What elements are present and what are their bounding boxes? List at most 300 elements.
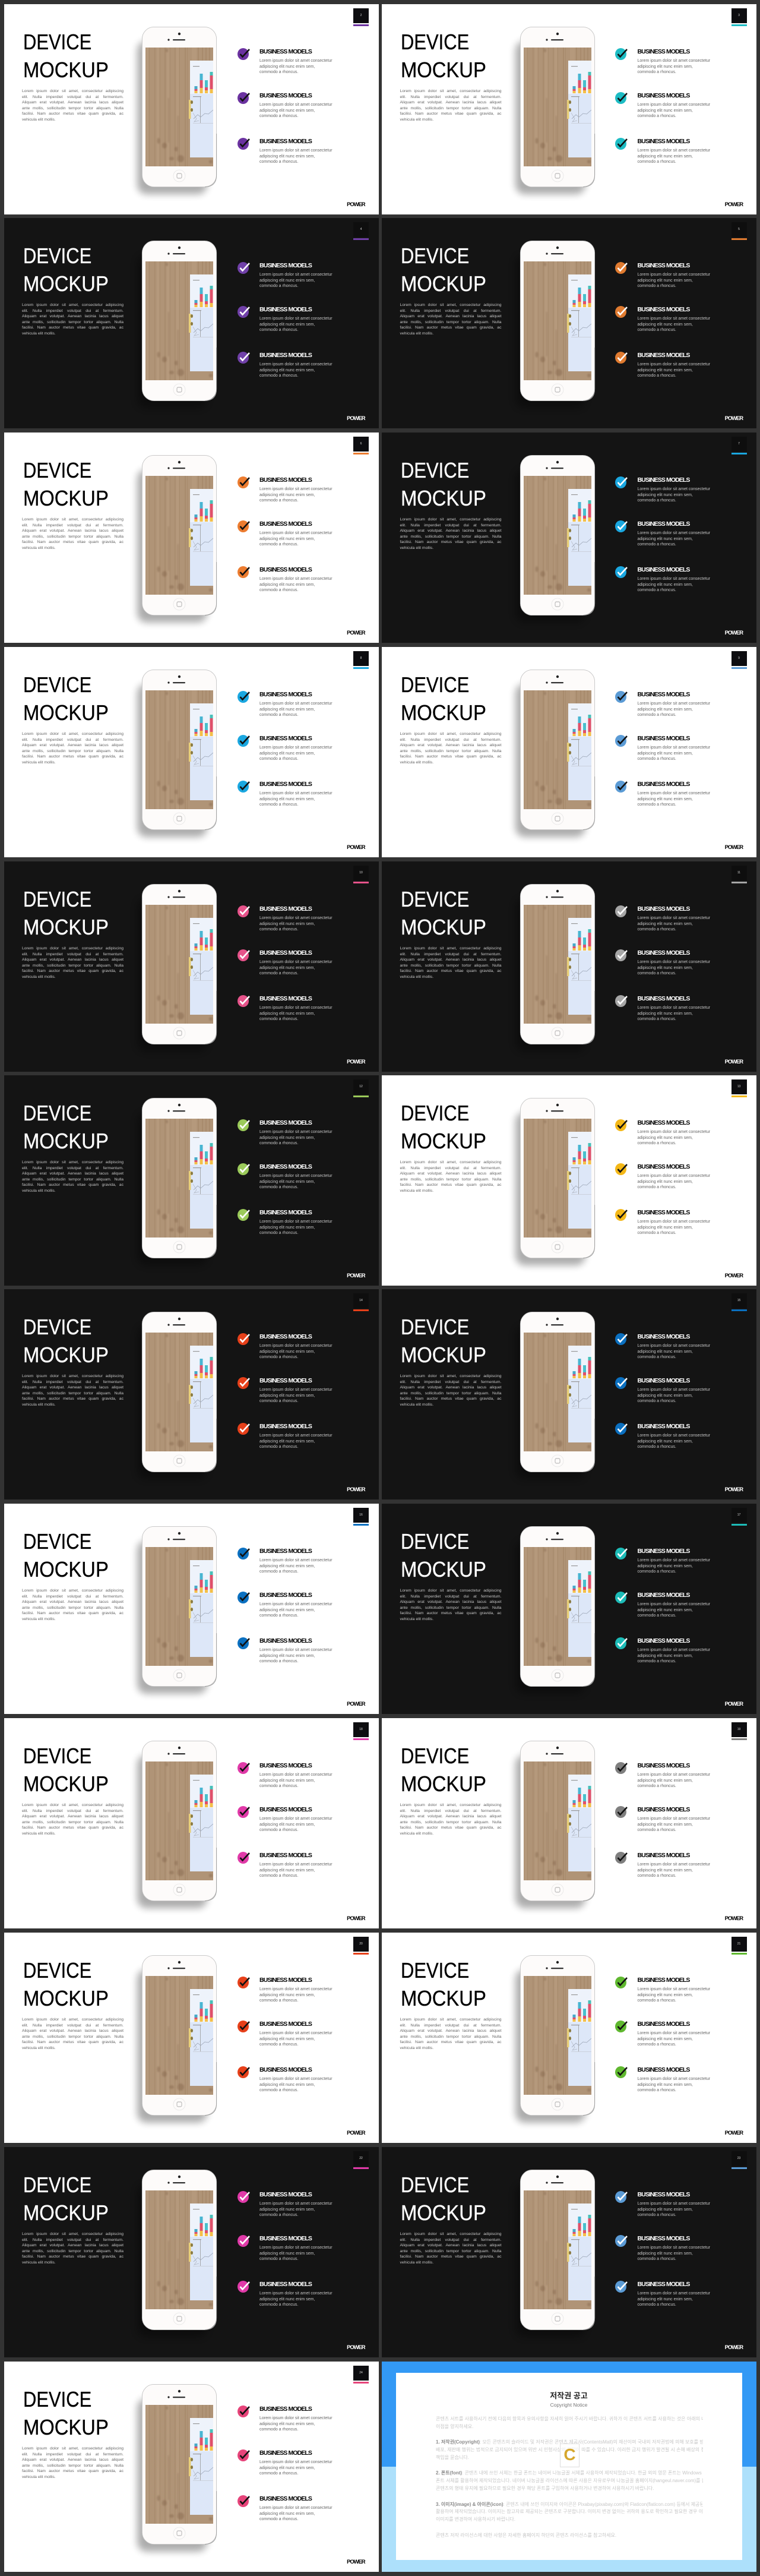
icon: check xyxy=(238,138,250,150)
brand label: POWER xyxy=(347,2559,365,2565)
text block: elit. Nulla imperdiet volutpat dui at fermentum. xyxy=(400,2023,501,2028)
feature item 2: BUSINESS MODELS xyxy=(638,735,690,742)
feature item 2 xyxy=(238,92,332,118)
feature item 1: Lorem ipsum dolor sit amet consectetur xyxy=(638,273,710,277)
feature item 2: adipiscing elit nunc enim sem, xyxy=(259,323,315,327)
feature item 2: BUSINESS MODELS xyxy=(259,306,312,313)
icon: check xyxy=(238,92,250,104)
title: DEVICE xyxy=(401,458,469,482)
phone mockup xyxy=(520,1955,595,2116)
phone mockup xyxy=(520,1098,595,1258)
title xyxy=(401,244,486,296)
text block: Aliquam erat volutpat. Aenean lacinia lacus aliquet xyxy=(400,2243,501,2247)
text block: elit. Nulla imperdiet volutpat dui at fermentum. xyxy=(400,1595,501,1599)
text block: vehicula elit mollis. xyxy=(22,1617,56,1621)
feature item 1: BUSINESS MODELS xyxy=(259,691,312,698)
feature item 2: commodo a rhoncus. xyxy=(259,2471,298,2476)
feature item 3 xyxy=(613,994,720,1028)
title xyxy=(23,1314,124,1369)
icon: check xyxy=(613,2190,628,2204)
text block: ante mollis, sollicitudin tempor tortor aliquam. Nulla xyxy=(400,749,501,753)
text block: ante mollis, sollicitudin tempor tortor aliquam. Nulla xyxy=(22,1391,124,1396)
text block: ante mollis, sollicitudin tempor tortor aliquam. Nulla xyxy=(400,1177,501,1182)
feature item 1 xyxy=(235,1118,342,1153)
icon: check xyxy=(235,1805,251,1819)
text block: vehicula elit mollis. xyxy=(400,1832,433,1836)
feature item 2 xyxy=(613,2019,720,2054)
text block: vehicula elit mollis. xyxy=(22,2261,56,2265)
feature item 2: commodo a rhoncus. xyxy=(259,1614,298,1618)
feature item 1: commodo a rhoncus. xyxy=(259,2213,298,2217)
feature item 1 xyxy=(235,1761,342,1795)
feature item 2: BUSINESS MODELS xyxy=(259,2449,312,2457)
feature item 2: adipiscing elit nunc enim sem, xyxy=(638,109,693,113)
text block: Aliquam erat volutpat. Aenean lacinia lacus aliquet xyxy=(22,2458,124,2462)
text block: elit. Nulla imperdiet volutpat dui at fermentum. xyxy=(22,2238,124,2242)
feature item 1: Lorem ipsum dolor sit amet consectetur xyxy=(259,273,332,277)
icon: check xyxy=(613,1208,628,1222)
feature item 2: commodo a rhoncus. xyxy=(259,328,298,332)
title: DEVICE xyxy=(401,1529,469,1554)
feature item 3 xyxy=(235,1851,342,1885)
icon: check xyxy=(613,1636,628,1650)
feature item 1: BUSINESS MODELS xyxy=(638,48,690,55)
page number badge: 12 xyxy=(359,1085,363,1088)
logo: C stamp xyxy=(560,2444,580,2467)
text block: Lorem ipsum dolor sit amet, consectetur adipiscing xyxy=(22,732,124,736)
feature item 3: BUSINESS MODELS xyxy=(638,2281,690,2288)
text block: Aliquam erat volutpat. Aenean lacinia lacus aliquet xyxy=(22,529,124,533)
icon: check xyxy=(235,1851,251,1865)
title: DEVICE xyxy=(23,1101,91,1125)
feature item 1: adipiscing elit nunc enim sem, xyxy=(638,1564,693,1568)
icon: check xyxy=(235,904,251,918)
feature item 2: adipiscing elit nunc enim sem, xyxy=(259,752,315,756)
icon: check xyxy=(235,1546,251,1561)
icon: check xyxy=(235,475,251,490)
panel: slide 4 xyxy=(4,218,379,428)
feature item 3 xyxy=(235,2494,342,2528)
page number badge xyxy=(353,1722,369,1740)
page number badge: 24 xyxy=(359,2370,363,2374)
brand label: POWER xyxy=(347,1273,365,1279)
text block: vehicula elit mollis. xyxy=(22,2046,56,2050)
panel: slide 12 xyxy=(4,1075,379,1286)
feature item 1: Lorem ipsum dolor sit amet consectetur xyxy=(259,1130,332,1134)
feature item 3: adipiscing elit nunc enim sem, xyxy=(259,1439,315,1444)
text block: ante mollis, sollicitudin tempor tortor aliquam. Nulla xyxy=(400,1606,501,1610)
text block: ante mollis, sollicitudin tempor tortor aliquam. Nulla xyxy=(400,2249,501,2253)
text block xyxy=(400,1588,501,1622)
feature item 2: Lorem ipsum dolor sit amet consectetur xyxy=(259,531,332,535)
feature item 1: adipiscing elit nunc enim sem, xyxy=(259,2208,315,2212)
phone mockup xyxy=(142,2384,217,2545)
feature item 3: adipiscing elit nunc enim sem, xyxy=(259,2297,315,2302)
text block: vehicula elit mollis. xyxy=(22,332,56,336)
feature item 3: adipiscing elit nunc enim sem, xyxy=(259,154,315,159)
feature item 2: BUSINESS MODELS xyxy=(638,1163,690,1170)
icon: check xyxy=(235,948,251,962)
feature item 1: adipiscing elit nunc enim sem, xyxy=(638,65,693,69)
feature item 3: commodo a rhoncus. xyxy=(638,803,676,807)
feature item 3 xyxy=(615,138,710,164)
icon: check xyxy=(613,994,628,1008)
feature item 1: adipiscing elit nunc enim sem, xyxy=(259,2422,315,2426)
feature item 2: BUSINESS MODELS xyxy=(259,735,312,742)
feature item 2 xyxy=(235,2234,342,2268)
feature item 1: BUSINESS MODELS xyxy=(259,1333,312,1340)
feature item 2: commodo a rhoncus. xyxy=(259,757,298,761)
feature item 1 xyxy=(235,2190,342,2224)
feature item 2: Lorem ipsum dolor sit amet consectetur xyxy=(259,103,332,107)
feature item 2: adipiscing elit nunc enim sem, xyxy=(259,1608,315,1612)
title: DEVICE xyxy=(23,2173,91,2197)
text block: facilisi. Nam auctor metus vitae quam gravida, ac xyxy=(22,2469,124,2473)
icon: check xyxy=(615,262,628,274)
feature item 1 xyxy=(238,262,332,288)
feature item 3: BUSINESS MODELS xyxy=(259,1637,312,1644)
text block: Lorem ipsum dolor sit amet, consectetur adipiscing xyxy=(400,1803,501,1807)
icon: check xyxy=(613,904,628,918)
feature item 3 xyxy=(235,2065,342,2100)
text block: Lorem ipsum dolor sit amet, consectetur adipiscing xyxy=(22,517,124,522)
feature item 1: BUSINESS MODELS xyxy=(638,1977,690,1984)
text block: Lorem ipsum dolor sit amet, consectetur adipiscing xyxy=(400,1160,501,1164)
feature item 3: commodo a rhoncus. xyxy=(638,588,676,592)
feature item 1: adipiscing elit nunc enim sem, xyxy=(259,1993,315,1997)
text block: Aliquam erat volutpat. Aenean lacinia lacus aliquet xyxy=(400,100,501,105)
page number badge: 16 xyxy=(359,1513,363,1516)
brand label: POWER xyxy=(347,2130,365,2136)
notice text: 콘텐츠의 형태 유지에 필요하므로 필요한 경우 해당 폰트를 구입하여 사용하거나 변경하여 사용하시기 바랍니다. xyxy=(436,2486,654,2491)
feature item 1: commodo a rhoncus. xyxy=(638,1141,676,1145)
feature item 1: Lorem ipsum dolor sit amet consectetur xyxy=(638,59,710,63)
feature item 1: adipiscing elit nunc enim sem, xyxy=(638,1993,693,1997)
title: DEVICE xyxy=(23,30,91,54)
feature item 2 xyxy=(613,734,720,768)
feature item 2 xyxy=(235,519,342,554)
feature item 3: BUSINESS MODELS xyxy=(259,1852,312,1859)
text block: facilisi. Nam auctor metus vitae quam gravida, ac xyxy=(22,326,124,330)
feature item 3: adipiscing elit nunc enim sem, xyxy=(259,1868,315,1873)
feature item 3: commodo a rhoncus. xyxy=(259,803,298,807)
title: MOCKUP xyxy=(401,915,486,939)
text block: facilisi. Nam auctor metus vitae quam gravida, ac xyxy=(22,1611,124,1615)
feature item 1: commodo a rhoncus. xyxy=(638,713,676,717)
feature item 2: adipiscing elit nunc enim sem, xyxy=(638,1823,693,1827)
text block: Aliquam erat volutpat. Aenean lacinia lacus aliquet xyxy=(400,1814,501,1819)
page number badge xyxy=(353,1508,369,1526)
title: MOCKUP xyxy=(401,57,486,82)
brand label: POWER xyxy=(725,1486,743,1493)
feature item 2 xyxy=(235,734,342,768)
feature item 2: adipiscing elit nunc enim sem, xyxy=(259,109,315,113)
text block: vehicula elit mollis. xyxy=(22,760,56,765)
feature item 2: commodo a rhoncus. xyxy=(638,542,676,547)
text block: vehicula elit mollis. xyxy=(400,332,433,336)
panel: slide 18 xyxy=(4,1718,379,1928)
text block: elit. Nulla imperdiet volutpat dui at fermentum. xyxy=(400,952,501,956)
title xyxy=(23,1100,124,1155)
feature item 1: commodo a rhoncus. xyxy=(259,1999,298,2003)
icon: check xyxy=(613,734,628,748)
feature item 1 xyxy=(235,1546,342,1581)
feature item 3: commodo a rhoncus. xyxy=(638,1659,676,1663)
feature item 2: BUSINESS MODELS xyxy=(638,92,690,99)
feature item 1: adipiscing elit nunc enim sem, xyxy=(259,65,315,69)
icon: check xyxy=(235,519,251,533)
icon: check xyxy=(235,1162,251,1176)
text block: facilisi. Nam auctor metus vitae quam gravida, ac xyxy=(400,540,501,544)
feature item 3: commodo a rhoncus. xyxy=(638,160,676,164)
feature item 3: adipiscing elit nunc enim sem, xyxy=(638,154,693,159)
feature item 3 xyxy=(613,1208,720,1242)
text block xyxy=(22,2446,124,2480)
page number badge: 19 xyxy=(737,1728,740,1731)
panel: slide 16 xyxy=(4,1504,379,1714)
text block xyxy=(400,946,501,980)
feature item 1 xyxy=(235,2404,342,2439)
title: DEVICE xyxy=(23,1958,91,1982)
text block: elit. Nulla imperdiet volutpat dui at fermentum. xyxy=(22,738,124,742)
feature item 1: adipiscing elit nunc enim sem, xyxy=(259,1779,315,1783)
page number badge: 3 xyxy=(738,13,740,17)
text block: vehicula elit mollis. xyxy=(400,118,433,122)
feature item 3: BUSINESS MODELS xyxy=(259,352,312,359)
text block: Aliquam erat volutpat. Aenean lacinia lacus aliquet xyxy=(400,1172,501,1176)
feature item 2: commodo a rhoncus. xyxy=(259,2043,298,2047)
text block: ante mollis, sollicitudin tempor tortor aliquam. Nulla xyxy=(400,2035,501,2039)
title xyxy=(23,2171,124,2227)
text block: facilisi. Nam auctor metus vitae quam gravida, ac xyxy=(22,2040,124,2044)
panel: slide 6 xyxy=(4,433,379,643)
title: DEVICE xyxy=(23,458,91,482)
feature item 2: BUSINESS MODELS xyxy=(259,92,312,99)
title: MOCKUP xyxy=(401,1557,486,1581)
feature item 2: BUSINESS MODELS xyxy=(638,1377,690,1384)
panel: slide 10 xyxy=(4,861,379,1072)
title: MOCKUP xyxy=(23,486,108,510)
text block: vehicula elit mollis. xyxy=(400,760,433,765)
notice text: 이미지를 변경하여 사용하시기 바랍니다. xyxy=(436,2517,515,2522)
icon: check xyxy=(235,1422,251,1436)
phone mockup xyxy=(520,1741,595,1901)
title: DEVICE xyxy=(23,887,91,911)
feature item 3: BUSINESS MODELS xyxy=(259,138,312,145)
text block: facilisi. Nam auctor metus vitae quam gravida, ac xyxy=(400,1397,501,1401)
brand label: POWER xyxy=(347,1701,365,1707)
text block: vehicula elit mollis. xyxy=(22,1832,56,1836)
feature item 3: BUSINESS MODELS xyxy=(638,995,690,1002)
feature item 2: adipiscing elit nunc enim sem, xyxy=(638,752,693,756)
text block: Aliquam erat volutpat. Aenean lacinia lacus aliquet xyxy=(400,2029,501,2033)
title xyxy=(23,244,108,296)
text block: ante mollis, sollicitudin tempor tortor aliquam. Nulla xyxy=(400,320,501,324)
feature item 3: commodo a rhoncus. xyxy=(259,1874,298,1878)
feature item 2: BUSINESS MODELS xyxy=(638,2021,690,2028)
icon: check xyxy=(613,1851,628,1865)
feature item 3: adipiscing elit nunc enim sem, xyxy=(259,583,315,587)
feature item 1: BUSINESS MODELS xyxy=(259,2405,312,2413)
feature item 1: BUSINESS MODELS xyxy=(638,1333,690,1340)
text block: facilisi. Nam auctor metus vitae quam gravida, ac xyxy=(400,112,501,116)
text block: vehicula elit mollis. xyxy=(22,546,56,550)
page number badge: 2 xyxy=(360,13,362,17)
text block xyxy=(22,517,124,551)
panel: slide 9 xyxy=(382,647,756,857)
feature item 3: Lorem ipsum dolor sit amet consectetur xyxy=(638,149,710,153)
page number badge: 22 xyxy=(359,2157,363,2160)
feature item 1: Lorem ipsum dolor sit amet consectetur xyxy=(638,1344,710,1348)
feature item 2: commodo a rhoncus. xyxy=(259,1399,298,1403)
text block: ante mollis, sollicitudin tempor tortor aliquam. Nulla xyxy=(22,1606,124,1610)
text block: elit. Nulla imperdiet volutpat dui at fermentum. xyxy=(400,1809,501,1813)
title xyxy=(401,1314,502,1369)
text block: Aliquam erat volutpat. Aenean lacinia lacus aliquet xyxy=(400,743,501,747)
feature item 1: commodo a rhoncus. xyxy=(259,1784,298,1788)
page number badge: 17 xyxy=(737,1513,740,1516)
feature item 1: commodo a rhoncus. xyxy=(259,284,298,288)
feature item 2: Lorem ipsum dolor sit amet consectetur xyxy=(638,317,710,321)
feature item 3 xyxy=(235,779,342,814)
page number badge xyxy=(732,227,747,240)
icon: check xyxy=(235,2494,251,2508)
title: DEVICE xyxy=(23,673,91,697)
brand label: POWER xyxy=(725,2130,743,2136)
brand label: POWER xyxy=(725,415,743,422)
title xyxy=(23,30,108,82)
phone mockup xyxy=(142,455,217,615)
text block: facilisi. Nam auctor metus vitae quam gravida, ac xyxy=(22,1183,124,1187)
page number badge: 6 xyxy=(360,442,362,446)
title: DEVICE xyxy=(401,887,469,911)
text block: ante mollis, sollicitudin tempor tortor aliquam. Nulla xyxy=(400,964,501,968)
notice text xyxy=(436,2416,703,2543)
feature item 2: Lorem ipsum dolor sit amet consectetur xyxy=(638,1817,710,1821)
feature item 3: commodo a rhoncus. xyxy=(259,160,298,164)
feature item 3: BUSINESS MODELS xyxy=(638,138,690,145)
feature item 2: BUSINESS MODELS xyxy=(259,1592,312,1599)
icon: check xyxy=(235,2190,251,2204)
feature item 1: adipiscing elit nunc enim sem, xyxy=(259,922,315,926)
text block: Aliquam erat volutpat. Aenean lacinia lacus aliquet xyxy=(22,958,124,962)
feature item 3: adipiscing elit nunc enim sem, xyxy=(638,1439,693,1444)
page number badge xyxy=(353,2366,369,2384)
feature item 1: commodo a rhoncus. xyxy=(638,927,676,932)
feature item 3: commodo a rhoncus. xyxy=(638,1017,676,1021)
feature item 2: BUSINESS MODELS xyxy=(259,2235,312,2242)
page number badge: 10 xyxy=(359,871,363,875)
text block: Aliquam erat volutpat. Aenean lacinia lacus aliquet xyxy=(22,1600,124,1604)
feature item 1: commodo a rhoncus. xyxy=(638,2213,676,2217)
title xyxy=(23,886,124,941)
brand label: POWER xyxy=(725,1915,743,1922)
text block: vehicula elit mollis. xyxy=(400,546,433,550)
text block xyxy=(22,2017,124,2051)
feature item 1 xyxy=(238,48,332,74)
text block: facilisi. Nam auctor metus vitae quam gravida, ac xyxy=(400,2255,501,2259)
feature item 1: Lorem ipsum dolor sit amet consectetur xyxy=(638,916,710,920)
feature item 3: adipiscing elit nunc enim sem, xyxy=(638,1226,693,1230)
text block: elit. Nulla imperdiet volutpat dui at fermentum. xyxy=(400,1166,501,1170)
feature item 2: Lorem ipsum dolor sit amet consectetur xyxy=(259,317,332,321)
title: DEVICE xyxy=(23,1315,91,1339)
text block xyxy=(22,1374,124,1407)
page number badge xyxy=(732,1937,747,1955)
icon: check xyxy=(613,1546,628,1561)
feature item 3: commodo a rhoncus. xyxy=(259,2303,298,2307)
panel: slide 3 xyxy=(382,4,756,214)
icon: check xyxy=(238,262,250,274)
panel: slide 24 xyxy=(4,2362,379,2572)
feature item 1 xyxy=(235,1975,342,2010)
text block: facilisi. Nam auctor metus vitae quam gravida, ac xyxy=(400,969,501,973)
icon: check xyxy=(235,1332,251,1346)
phone mockup xyxy=(520,1526,595,1687)
feature item 1 xyxy=(613,2190,720,2224)
icon: check xyxy=(235,994,251,1008)
text block: ante mollis, sollicitudin tempor tortor aliquam. Nulla xyxy=(400,1820,501,1824)
feature item 1 xyxy=(235,475,342,510)
feature item 3: commodo a rhoncus. xyxy=(638,1874,676,1878)
feature item 1: commodo a rhoncus. xyxy=(259,1355,298,1359)
text block: ante mollis, sollicitudin tempor tortor aliquam. Nulla xyxy=(22,749,124,753)
phone mockup xyxy=(133,27,217,198)
page number badge xyxy=(732,865,747,883)
feature item 2 xyxy=(235,1590,342,1625)
feature item 2: BUSINESS MODELS xyxy=(259,520,312,528)
feature item 3: Lorem ipsum dolor sit amet consectetur xyxy=(259,1862,332,1867)
feature item 2: commodo a rhoncus. xyxy=(259,1828,298,1832)
feature item 3: BUSINESS MODELS xyxy=(638,1423,690,1430)
phone mockup xyxy=(520,2170,595,2330)
feature item 2: BUSINESS MODELS xyxy=(638,1592,690,1599)
feature item 2 xyxy=(238,306,332,332)
text block: elit. Nulla imperdiet volutpat dui at fermentum. xyxy=(400,1380,501,1384)
feature item 1 xyxy=(613,1975,720,2010)
text block: vehicula elit mollis. xyxy=(400,975,433,979)
title: MOCKUP xyxy=(401,271,486,296)
feature item 1: Lorem ipsum dolor sit amet consectetur xyxy=(259,2416,332,2420)
page number badge xyxy=(353,1937,369,1955)
feature item 2: commodo a rhoncus. xyxy=(638,1614,676,1618)
text block xyxy=(22,1802,124,1836)
feature item 1: commodo a rhoncus. xyxy=(638,1999,676,2003)
feature item 3: BUSINESS MODELS xyxy=(259,2281,312,2288)
feature item 1: adipiscing elit nunc enim sem, xyxy=(638,279,693,283)
page number badge: 7 xyxy=(738,442,740,446)
title xyxy=(23,2386,124,2441)
feature item 2: BUSINESS MODELS xyxy=(259,1377,312,1384)
feature item 1 xyxy=(235,1332,342,1366)
text block xyxy=(400,303,501,336)
feature item 1: commodo a rhoncus. xyxy=(638,70,676,74)
feature item 3: Lorem ipsum dolor sit amet consectetur xyxy=(259,2077,332,2081)
feature item 2: commodo a rhoncus. xyxy=(638,1828,676,1832)
page number badge: 14 xyxy=(359,1299,363,1302)
title: MOCKUP xyxy=(23,2414,108,2439)
text block: Aliquam erat volutpat. Aenean lacinia lacus aliquet xyxy=(22,100,124,105)
title xyxy=(23,457,124,512)
text block: ante mollis, sollicitudin tempor tortor aliquam. Nulla xyxy=(22,2035,124,2039)
feature item 2: BUSINESS MODELS xyxy=(259,2021,312,2028)
feature item 2: adipiscing elit nunc enim sem, xyxy=(259,1180,315,1184)
feature item 2: adipiscing elit nunc enim sem, xyxy=(638,2037,693,2041)
feature item 3: adipiscing elit nunc enim sem, xyxy=(259,2083,315,2087)
feature item 3 xyxy=(613,2280,720,2314)
feature item 3: commodo a rhoncus. xyxy=(638,374,676,378)
phone mockup xyxy=(142,1098,217,1258)
